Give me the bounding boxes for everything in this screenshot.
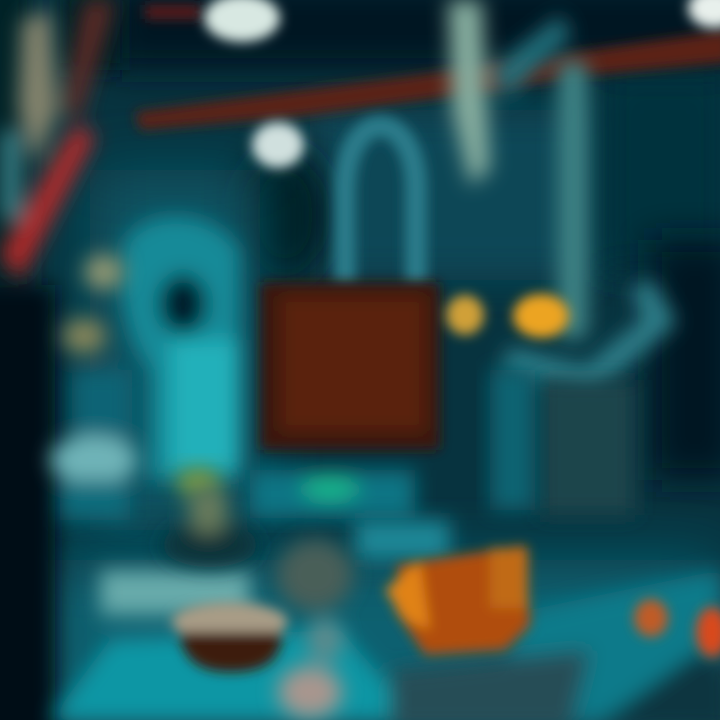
green glow strip (176, 468, 415, 518)
padlock body: brown square (260, 282, 440, 450)
left side highlights (50, 254, 138, 520)
central clutter (277, 539, 353, 718)
ceiling lights (204, 0, 720, 168)
teal wrench shape (121, 217, 240, 480)
dark left column (0, 0, 120, 720)
orange dots (634, 599, 720, 657)
orange box (385, 545, 530, 655)
red diagonal stripe and cables (0, 0, 115, 280)
padlock shackle (345, 126, 416, 285)
hanging straps (448, 0, 588, 340)
tabletop (50, 520, 720, 720)
small dark object on table (162, 486, 258, 567)
bowl (172, 602, 288, 672)
red-brown ceiling beam (135, 5, 720, 130)
yellow lights (446, 294, 569, 338)
right padlock (490, 285, 660, 515)
